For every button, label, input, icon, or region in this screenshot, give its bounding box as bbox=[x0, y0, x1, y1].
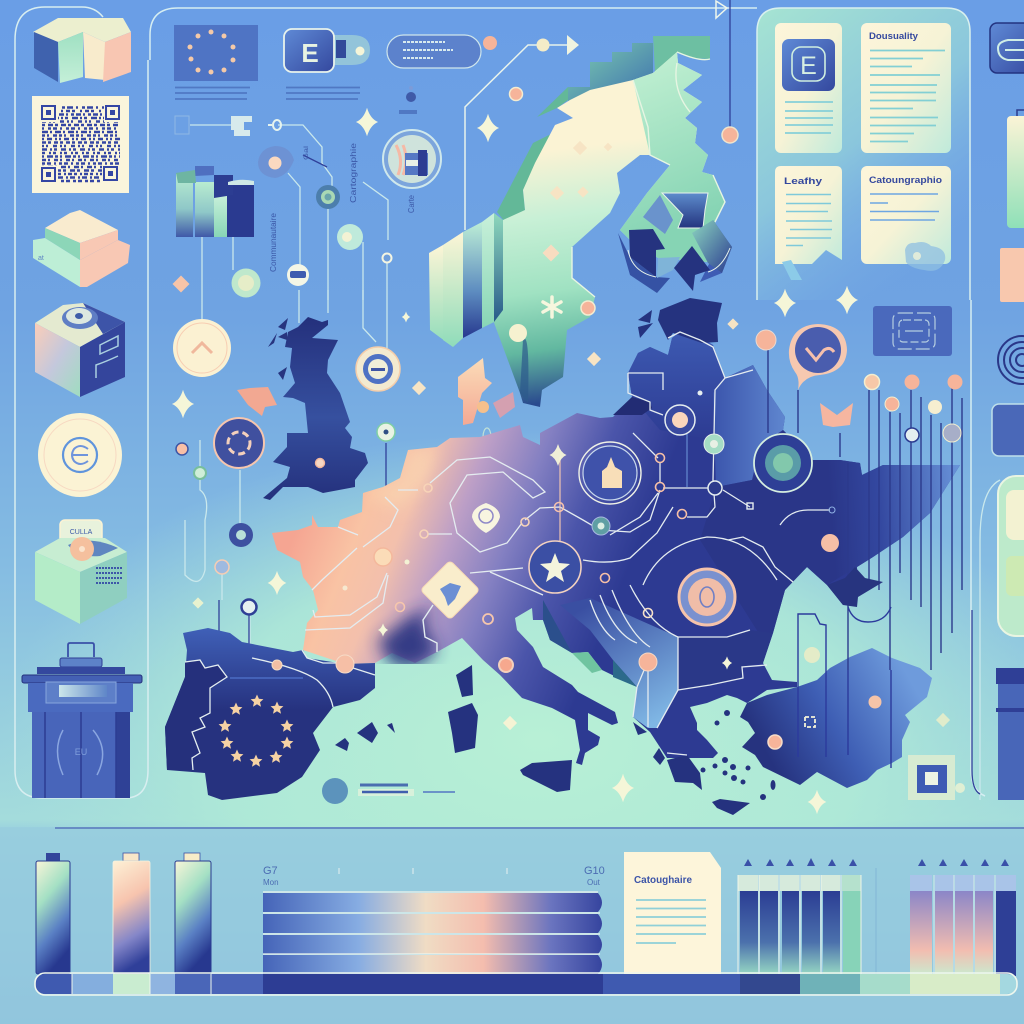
icon: e badge bbox=[990, 23, 1024, 73]
icon: star coin bbox=[529, 541, 581, 593]
panel: right documents bbox=[757, 8, 970, 300]
icon: recycling symbol bbox=[618, 193, 732, 293]
icon: sparkle centre bbox=[378, 312, 732, 670]
bar labels: G10 bbox=[584, 865, 605, 877]
map: Baltic north block bbox=[638, 298, 722, 343]
icon: QR code bbox=[32, 96, 129, 193]
icon: butterfly bbox=[477, 392, 515, 446]
node: bus badge bbox=[287, 264, 309, 286]
icon: diamond tag bbox=[420, 560, 480, 620]
document: emblem card bbox=[775, 23, 842, 153]
EU flag bbox=[174, 25, 258, 81]
icon: peach coin bbox=[679, 569, 735, 625]
map: vertical drips east bbox=[768, 350, 962, 670]
icon: asterisk bbox=[543, 297, 561, 317]
node: small ring bbox=[382, 254, 392, 262]
panel: left sidebar frame bbox=[15, 7, 148, 798]
icon: ireland pink tag bbox=[237, 387, 277, 416]
map: islands bbox=[335, 665, 665, 792]
pink columns chart bbox=[876, 859, 1016, 976]
icon: square badge bbox=[908, 755, 955, 800]
document: Catoughaire bbox=[624, 852, 721, 974]
map: region border lines bbox=[305, 332, 830, 755]
icon: recycling bin: EU bbox=[75, 747, 87, 757]
icon: fingerprint bbox=[998, 336, 1024, 384]
document: Leafhy bbox=[775, 166, 842, 280]
icon: green box with label bbox=[35, 520, 127, 624]
connector lines bbox=[185, 45, 1000, 800]
horizontal gradient bars bbox=[263, 892, 602, 974]
arrow: top frame arrow bbox=[716, 1, 727, 18]
bar labels bbox=[263, 865, 605, 887]
map: Crimea star bbox=[827, 567, 883, 607]
icon: stacked blocks: at bbox=[38, 255, 44, 262]
node: spiral coin bbox=[214, 418, 264, 468]
decorative diamonds bbox=[173, 141, 950, 730]
icon: home coin bbox=[579, 442, 641, 504]
icon: small pin bbox=[399, 86, 417, 112]
node: chevron coin bbox=[173, 319, 231, 377]
decorative sparkles bbox=[172, 108, 826, 814]
timeline base bar bbox=[35, 973, 1017, 995]
icon: peach card bbox=[1000, 248, 1024, 302]
document: Dousuality: Dousuality bbox=[869, 31, 919, 42]
node: green disc bbox=[232, 268, 260, 298]
icon: ring key bbox=[268, 120, 281, 130]
node: peach dot bubble bbox=[258, 146, 294, 178]
bar labels: Out bbox=[587, 878, 601, 887]
icon: lock label bbox=[175, 116, 189, 134]
bar labels: G7 bbox=[263, 865, 278, 877]
label pill bbox=[387, 35, 481, 68]
vertical labels: Cartographie bbox=[349, 142, 358, 203]
vertical labels: Gal bbox=[304, 146, 310, 160]
bar columns chart bbox=[176, 166, 254, 237]
document: Catoughaire: Catoughaire bbox=[634, 875, 692, 886]
node: small pins left bbox=[176, 443, 253, 574]
map: Turkey bbox=[740, 648, 932, 788]
map: United Kingdom bbox=[263, 317, 368, 500]
icon: speech bubble bbox=[789, 324, 847, 390]
caption under badge bbox=[286, 88, 360, 99]
icon: E badge bbox=[284, 29, 370, 72]
map: Denmark pink bbox=[458, 358, 492, 425]
right column: cut-off items bbox=[990, 23, 1024, 800]
node: green ring bbox=[316, 185, 340, 209]
vertical labels bbox=[269, 142, 416, 272]
icon: location coin bbox=[472, 503, 500, 533]
node: dome coin bbox=[383, 130, 441, 188]
map: Scandinavia bbox=[429, 36, 725, 407]
bar labels: Mon bbox=[263, 878, 279, 887]
icon: nodes on Scandinavia bbox=[483, 35, 738, 342]
document: emblem card: E bbox=[800, 52, 817, 80]
flag caption bbox=[175, 88, 250, 99]
icon: gauge coin bbox=[356, 347, 400, 391]
panel: central frame bbox=[150, 8, 985, 796]
icon: green box with label: CULLA bbox=[70, 529, 93, 536]
document: Leafhy: Leafhy bbox=[784, 176, 823, 187]
vertical labels: Communautaire bbox=[269, 212, 278, 272]
document: Catoungraphio: Catoungraphio bbox=[869, 175, 942, 186]
green columns chart bbox=[738, 858, 861, 976]
document: Dousuality bbox=[861, 23, 951, 153]
panel: left sidebar icons bbox=[22, 18, 142, 798]
legend: caption bbox=[322, 778, 455, 804]
map: faint coloured lines bbox=[560, 433, 687, 550]
icon: fingerprint panel bbox=[873, 306, 952, 356]
batteries bbox=[36, 853, 211, 974]
icon: tulip bbox=[820, 403, 853, 427]
icon: stacked blocks bbox=[33, 210, 130, 287]
panel: bottom chart area bbox=[35, 852, 1017, 995]
vertical labels: Carte bbox=[407, 194, 416, 213]
icon: green cube bbox=[33, 18, 131, 83]
document: Catoungraphio bbox=[861, 166, 951, 271]
map: curved lines south bbox=[798, 607, 891, 768]
icon: blue tag bbox=[992, 404, 1024, 456]
icon: recycling bin bbox=[22, 643, 142, 798]
map: interior nodes bbox=[242, 330, 965, 793]
icon: green lens bbox=[754, 434, 812, 492]
icon: E badge: E bbox=[301, 38, 319, 68]
icon: E coin bbox=[38, 413, 122, 497]
map: continental Europe bbox=[272, 332, 960, 765]
map: Iberia bbox=[165, 628, 375, 800]
connector lines navy bbox=[219, 0, 980, 794]
map: Italy border bbox=[423, 605, 437, 652]
icon: green device bbox=[998, 476, 1024, 636]
icon: tall battery bbox=[1007, 110, 1024, 228]
map: Peloponnese and Crete bbox=[667, 710, 776, 815]
icon: stars below documents bbox=[774, 286, 858, 317]
divider: map bottom rule bbox=[55, 827, 1024, 829]
node: pale bubble bbox=[337, 224, 363, 250]
EU star ring bbox=[219, 694, 293, 767]
icon: camera cube bbox=[35, 303, 125, 397]
icon: connector plug bbox=[231, 116, 252, 136]
icon: recycling bin cut off bbox=[996, 668, 1024, 800]
